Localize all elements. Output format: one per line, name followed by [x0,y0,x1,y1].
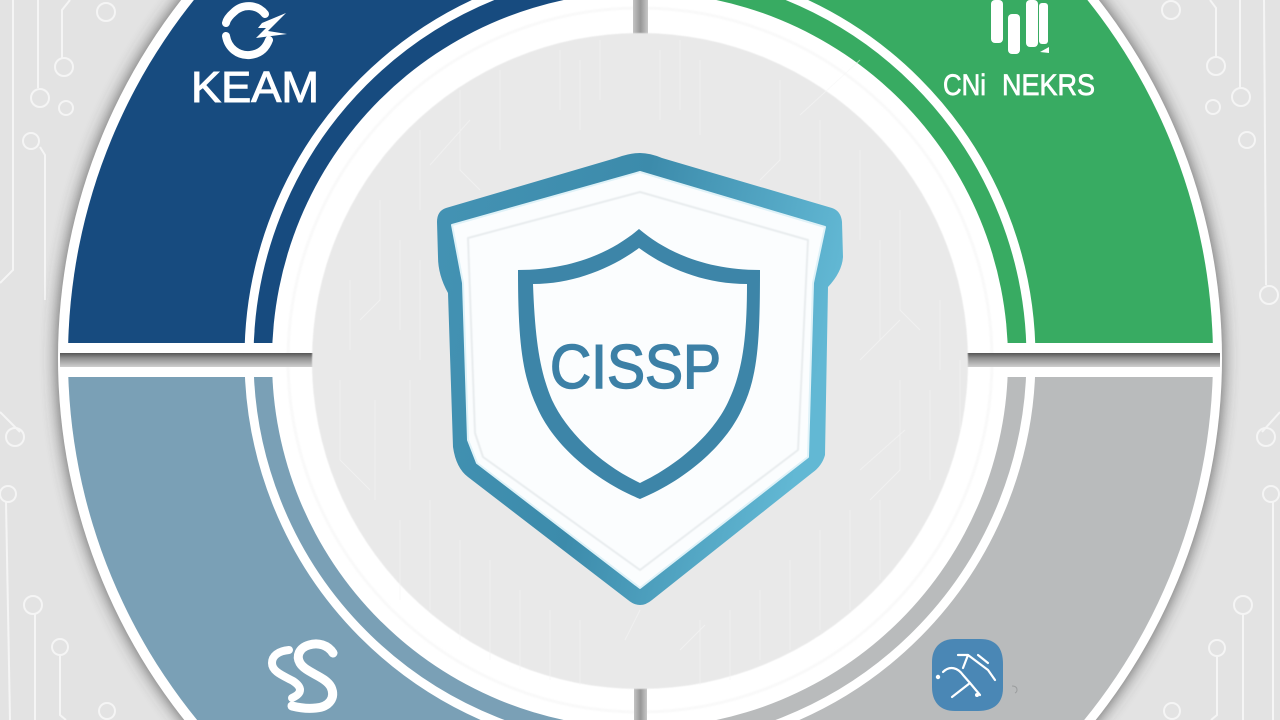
panel: blue quadrant [68,0,564,343]
icon: blue rounded square with branches [932,639,1003,711]
small shield emblem [518,229,760,499]
bottom vertical gap [634,688,647,720]
central white disc [272,0,1008,720]
logo: SS [272,644,333,708]
logo: CN NEKRS [943,0,1095,102]
inner white ring stripe [249,0,1031,720]
shield groove line [468,192,808,570]
central grey circle [312,33,968,689]
logo: KEAM [191,6,319,112]
panel: steel blue quadrant [68,377,564,720]
top vertical gap [633,0,648,36]
central circuit texture [340,40,960,685]
shield inner plate [452,172,825,588]
icon: ring with swoosh [226,6,287,55]
icon: bars [991,0,1049,54]
CNi text: CNi [943,69,986,102]
disc soft inner ring [288,8,992,712]
CISSP label: CISSP [550,333,721,402]
central shield badge [437,153,843,605]
small grey mark [1012,686,1017,693]
right horizontal gap [965,353,1220,367]
NEKRS text: NEKRS [1002,69,1095,102]
shield outer frame [437,153,843,605]
panel: green quadrant [716,0,1213,343]
KEAM text: KEAM [191,63,319,112]
panel: grey quadrant [716,377,1213,720]
left horizontal gap [60,353,315,367]
